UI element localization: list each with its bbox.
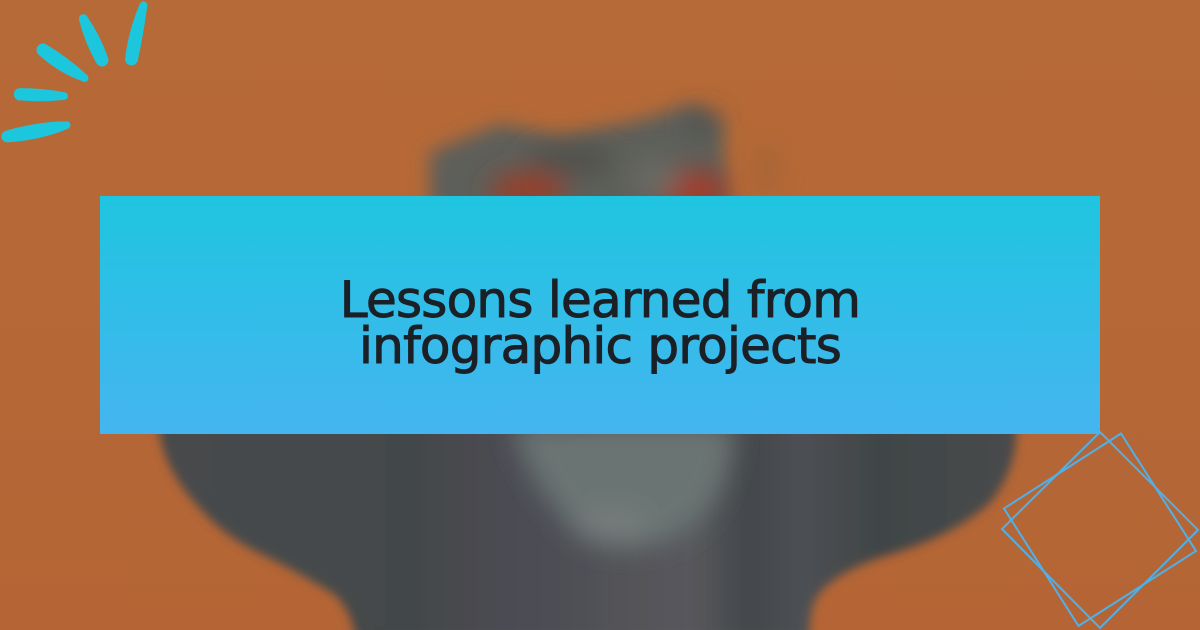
title: Lessons learned from	[340, 271, 860, 329]
title banner	[100, 196, 1100, 434]
title	[340, 271, 860, 375]
title: infographic projects	[359, 317, 841, 375]
icon: overlapping outlined squares	[1002, 432, 1198, 628]
icon: cyan burst strokes	[2, 2, 147, 142]
